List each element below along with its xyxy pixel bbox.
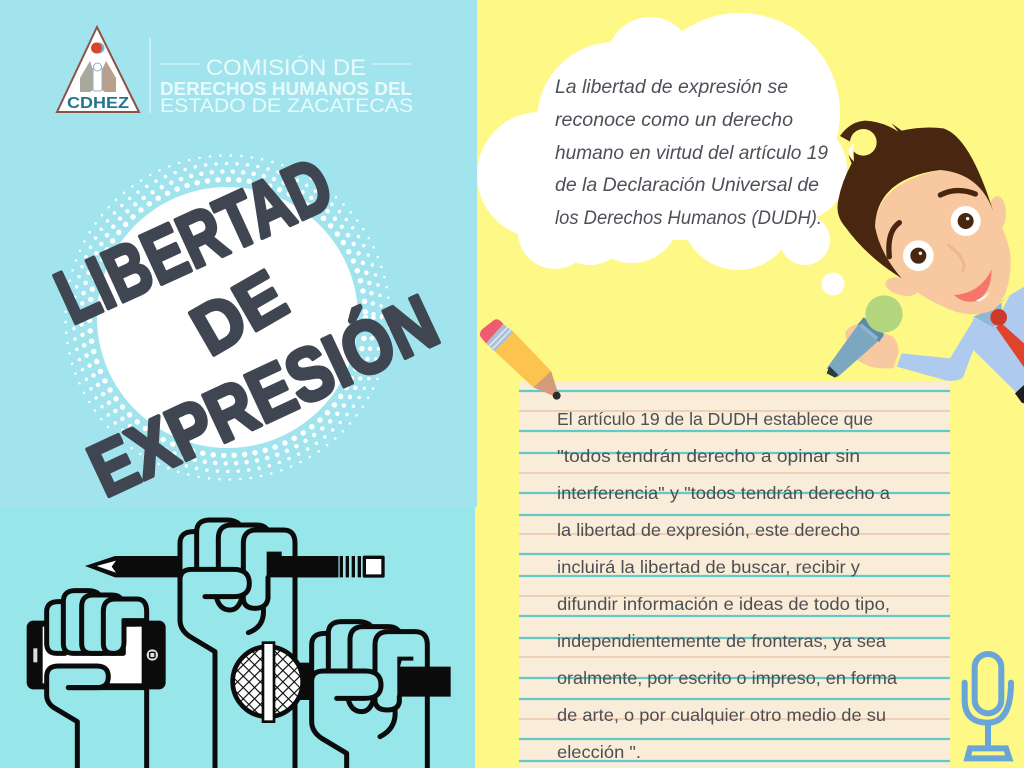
bubble text: de la Declaración Universal de — [555, 175, 819, 196]
shirt — [897, 287, 1024, 400]
title: LIBERTAD — [44, 142, 345, 340]
title: DE — [178, 255, 299, 370]
paper text: El artículo 19 de la DUDH establece que — [557, 409, 873, 429]
notebook paper — [519, 382, 950, 768]
title — [44, 142, 450, 513]
microphone handle — [397, 657, 451, 703]
blue rules — [519, 391, 950, 761]
panel: left blue header background — [0, 0, 477, 507]
thought bubble — [477, 13, 847, 296]
logo: institution name — [150, 38, 413, 117]
mouth — [954, 269, 992, 302]
belt — [1015, 385, 1024, 403]
bubble text: La libertad de expresión se — [555, 77, 788, 98]
eyes — [903, 206, 981, 271]
icon: microphone outline — [965, 654, 1011, 758]
logo: institution name: COMISIÓN DE — [206, 55, 366, 80]
title backdrop: white circle with dots — [66, 156, 390, 480]
phone fist — [47, 591, 147, 768]
hair — [837, 121, 993, 278]
panel: fists illustration background — [0, 507, 475, 768]
paper text: "todos tendrán derecho a opinar sin — [557, 446, 860, 466]
collar — [973, 295, 1010, 327]
hand — [845, 323, 899, 368]
logo: institution name: ESTADO DE ZACATECAS — [160, 96, 413, 117]
paper text: incluirá la libertad de buscar, recibir y — [557, 557, 860, 577]
bubble text: los Derechos Humanos (DUDH). — [555, 208, 822, 229]
pencil — [85, 556, 383, 577]
right fist — [312, 622, 427, 768]
illustration: raised fists with pencil, phone and microphone — [27, 520, 451, 768]
logo: CDHEZ triangle — [57, 27, 139, 112]
ears — [883, 196, 1006, 299]
paper text: de arte, o por cualquier otro medio de su — [557, 705, 886, 725]
bubble text — [555, 77, 828, 229]
center fist — [180, 520, 295, 768]
title: EXPRESIÓN — [76, 279, 450, 513]
microphone — [233, 643, 318, 722]
pencil over finger — [267, 552, 338, 597]
paper text — [557, 409, 897, 762]
icon: pencil — [480, 319, 561, 400]
eyebrows — [889, 191, 975, 257]
microphone — [827, 295, 903, 378]
bubble text: reconoce como un derecho — [555, 110, 793, 131]
right yellow background — [477, 0, 1024, 768]
red rules — [519, 411, 950, 719]
bubble text: humano en virtud del artículo 19 — [555, 143, 828, 164]
logo: CDHEZ triangle: CDHEZ — [67, 95, 129, 112]
paper text: elección ". — [557, 742, 641, 762]
phone — [27, 621, 166, 689]
paper text: interferencia" y "todos tendrán derecho a — [557, 483, 890, 503]
paper text: oralmente, por escrito o impreso, en forma — [557, 668, 897, 688]
nose — [948, 245, 964, 271]
paper text: independientemente de fronteras, ya sea — [557, 631, 886, 651]
paper text: difundir información e ideas de todo tipo, — [557, 594, 890, 614]
logo: institution name: DERECHOS HUMANOS DEL — [160, 78, 412, 99]
paper text: la libertad de expresión, este derecho — [557, 520, 860, 540]
tie — [990, 309, 1024, 367]
character with microphone — [827, 121, 1024, 403]
face — [875, 170, 1011, 314]
